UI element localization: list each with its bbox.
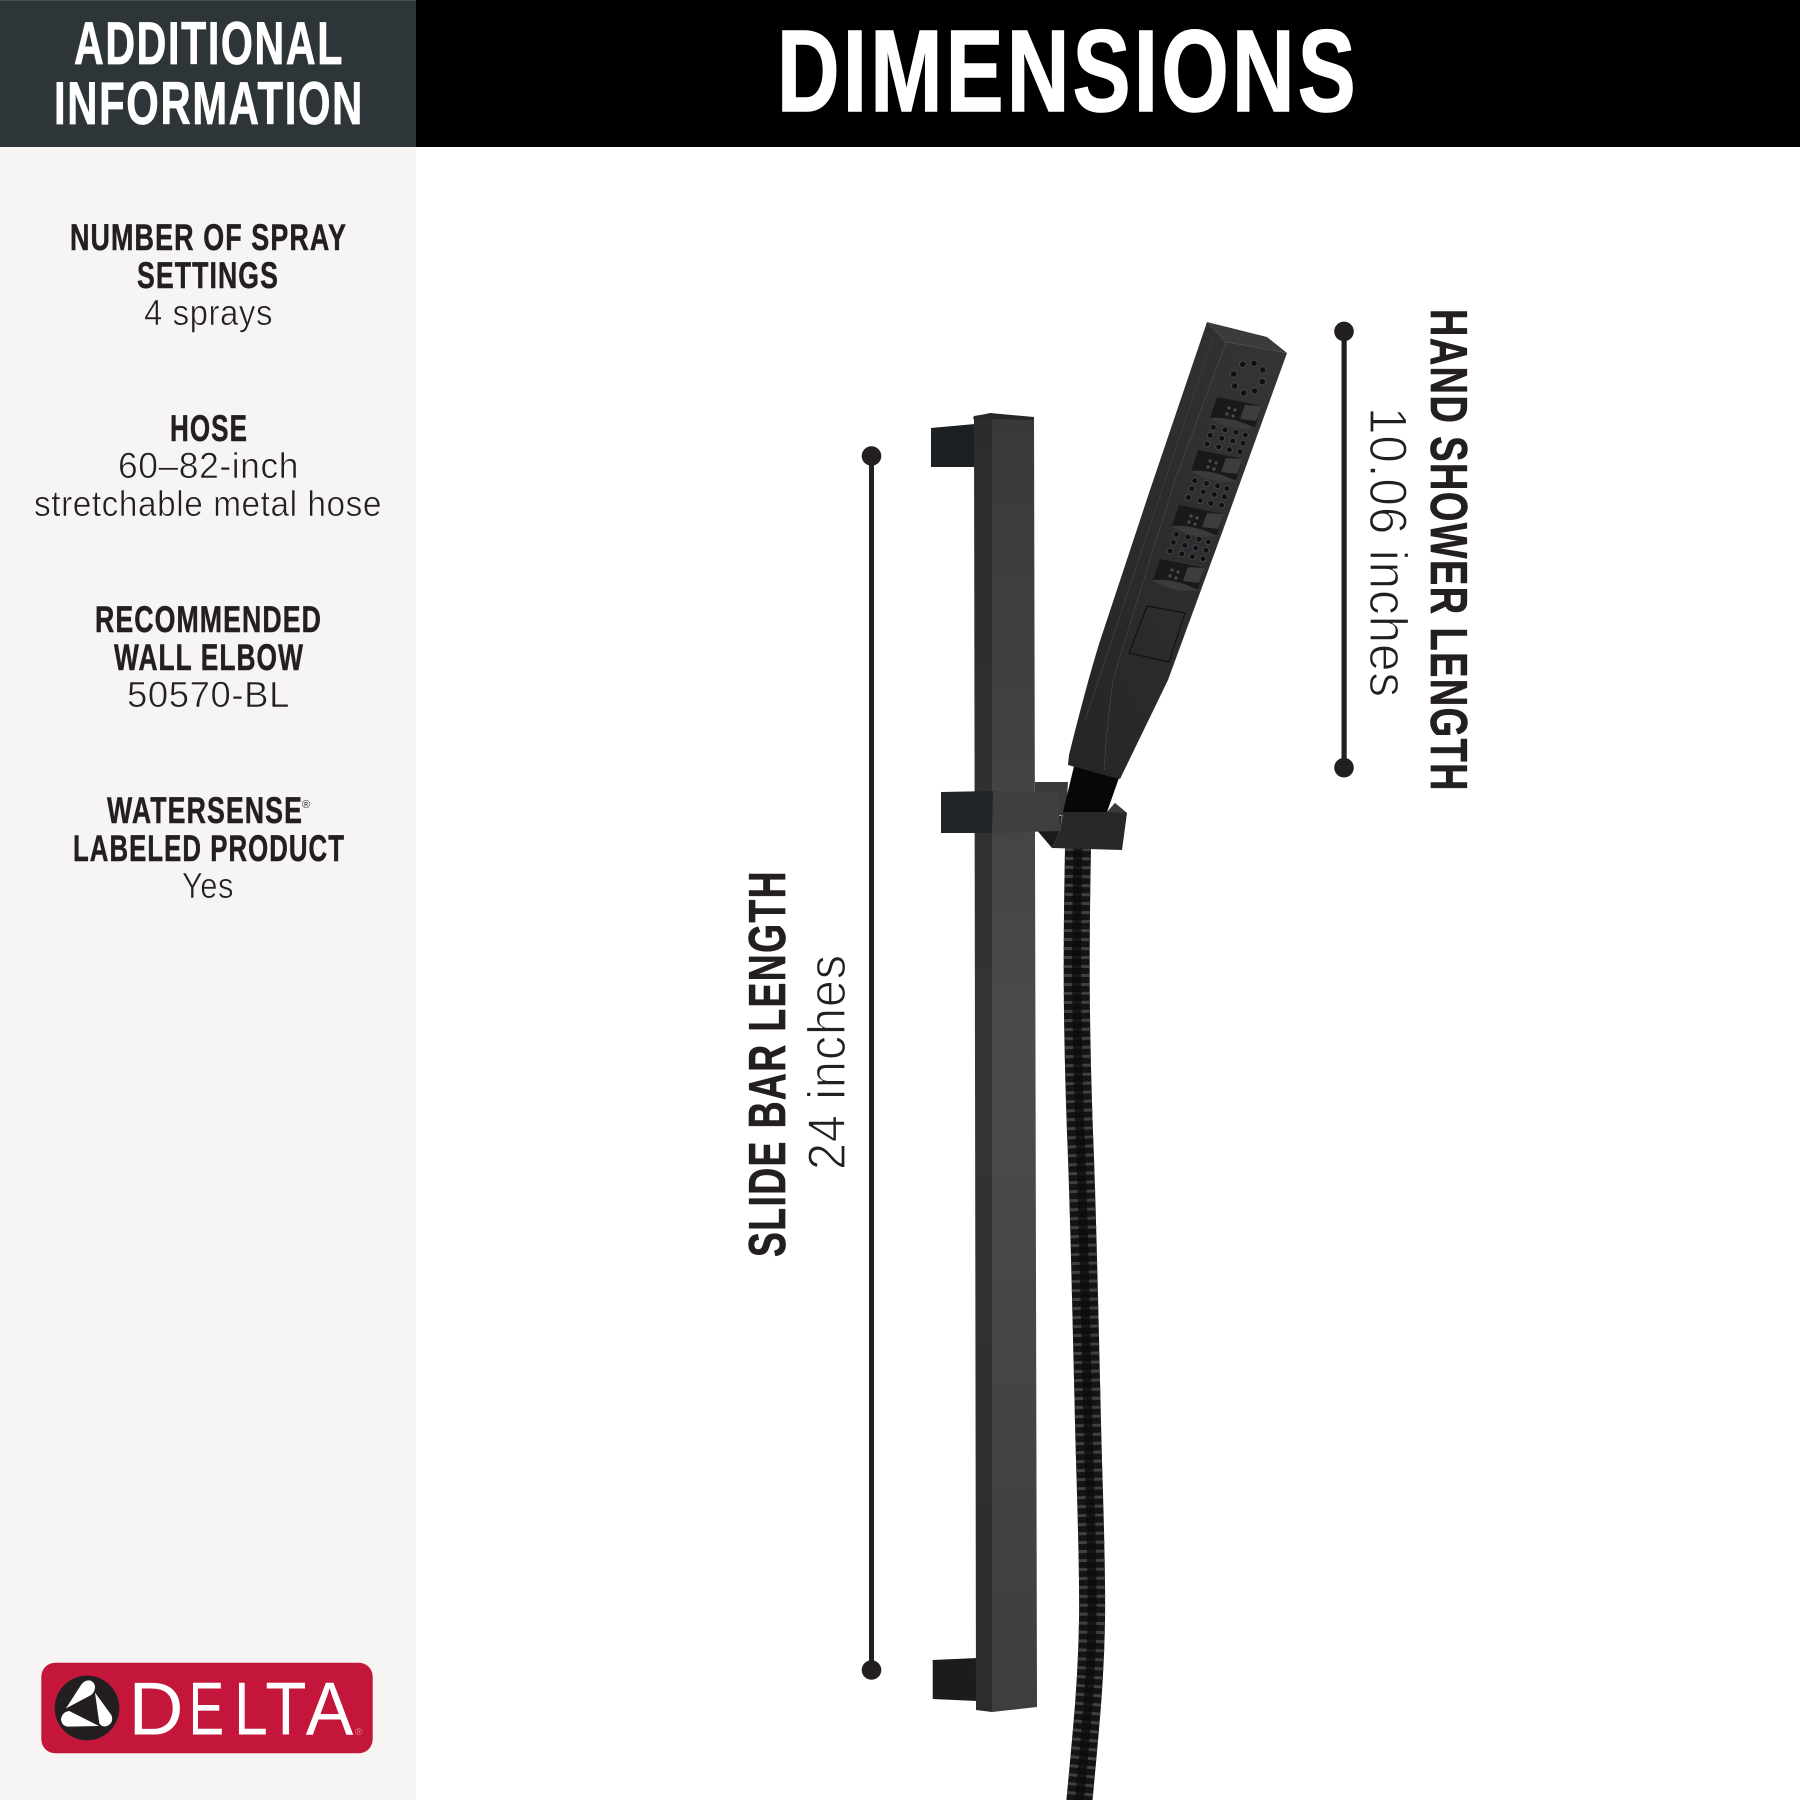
label: 10.06 inches: 10.06 inches bbox=[1358, 407, 1417, 698]
text block: hose: stretchable metal hose bbox=[34, 483, 382, 524]
text block: recommended wall elbow: 50570-BL bbox=[127, 674, 290, 715]
hose bbox=[1077, 848, 1092, 1800]
bottom wall bracket bbox=[933, 1658, 977, 1701]
spray nozzle grids bbox=[1167, 424, 1248, 562]
top wall bracket bbox=[931, 424, 975, 467]
wordmark: delta: E bbox=[189, 1667, 224, 1751]
text block: watersense labeled product: ® bbox=[302, 799, 310, 811]
text block: number of spray settings: SETTINGS bbox=[137, 255, 279, 296]
slider block bbox=[941, 791, 1060, 833]
spray nozzle ring bbox=[1230, 360, 1266, 396]
text block: recommended wall elbow bbox=[95, 599, 322, 715]
label: 24 inches: 24 inches bbox=[798, 954, 857, 1170]
wordmark: delta: A bbox=[306, 1667, 354, 1751]
wordmark: delta: T bbox=[265, 1667, 306, 1751]
dimension line: slide bar length bbox=[862, 446, 881, 1680]
icon: delta triangle mark bbox=[55, 1676, 119, 1740]
text block: watersense labeled product bbox=[73, 790, 345, 906]
wordmark: delta: D bbox=[128, 1667, 184, 1751]
product: hand shower on slide bar bbox=[931, 322, 1287, 1800]
heading: additional information: ADDITIONAL bbox=[74, 10, 344, 77]
text block: number of spray settings bbox=[70, 217, 347, 333]
holder back bbox=[1035, 782, 1068, 815]
label: slide bar length: SLIDE BAR LENGTH bbox=[739, 870, 797, 1257]
logo: delta: ® bbox=[355, 1727, 363, 1738]
hand shower body bbox=[1068, 322, 1287, 779]
logo: delta bbox=[41, 1663, 373, 1753]
holder front bbox=[1052, 803, 1127, 850]
text block: recommended wall elbow: WALL ELBOW bbox=[114, 637, 304, 678]
text block: watersense labeled product: Yes bbox=[182, 865, 234, 906]
wordmark: delta: L bbox=[234, 1667, 268, 1751]
title: dimensions: DIMENSIONS bbox=[777, 6, 1359, 136]
panel: additional information header bbox=[0, 0, 416, 147]
text block: hose bbox=[34, 408, 382, 524]
label: hand shower length: HAND SHOWER LENGTH bbox=[1419, 309, 1477, 792]
connector bbox=[1063, 762, 1120, 812]
text block: recommended wall elbow: RECOMMENDED bbox=[95, 599, 322, 640]
text block: hose: 60–82-inch bbox=[118, 445, 299, 486]
text block: number of spray settings: 4 sprays bbox=[144, 292, 273, 333]
slide bar bbox=[973, 413, 1037, 1712]
panel: sidebar background bbox=[0, 147, 416, 1800]
heading: additional information: INFORMATION bbox=[54, 70, 364, 137]
text block: hose: HOSE bbox=[170, 408, 248, 449]
dimension line: hand shower length bbox=[1334, 322, 1354, 778]
text block: number of spray settings: NUMBER OF SPRAY bbox=[70, 217, 347, 258]
text block: watersense labeled product: LABELED PRODUCT bbox=[73, 828, 345, 869]
panel: dimensions header bbox=[416, 0, 1800, 147]
text block: watersense labeled product: WATERSENSE bbox=[107, 790, 303, 831]
spray slots bbox=[1152, 397, 1262, 591]
switch panel bbox=[1129, 606, 1185, 662]
heading: additional information bbox=[54, 10, 364, 137]
